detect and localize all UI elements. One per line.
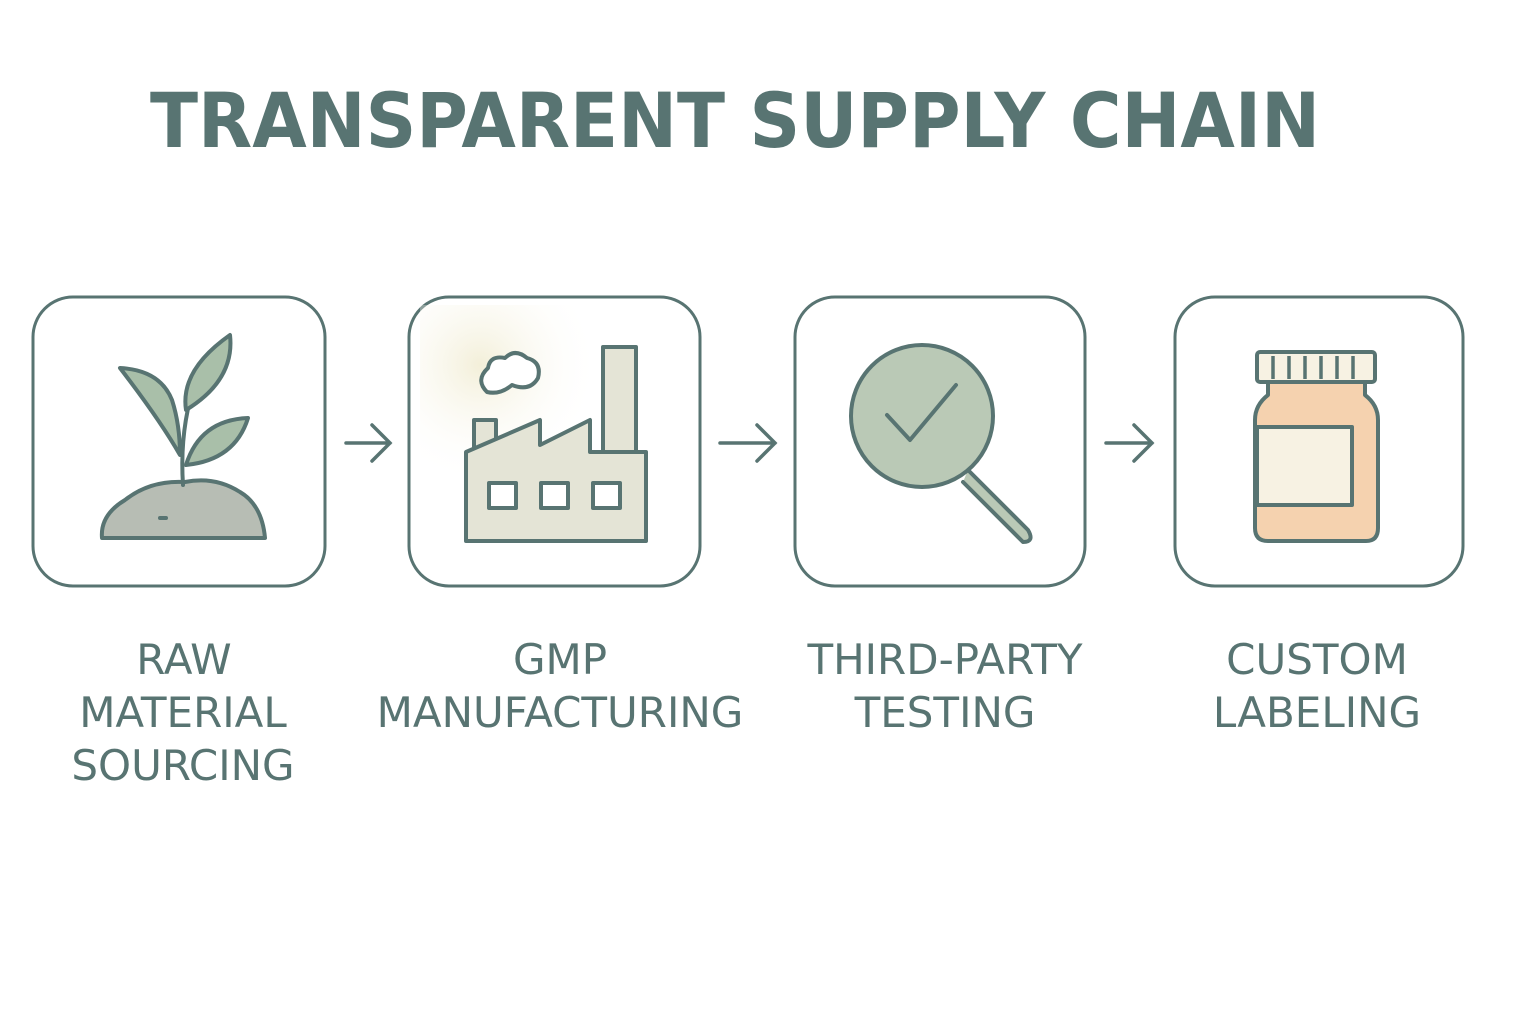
arrow 1 xyxy=(346,425,390,461)
label: raw material sourcing: RAW xyxy=(136,635,232,684)
panel: custom labeling xyxy=(1175,297,1463,586)
label: GMP manufacturing: MANUFACTURING xyxy=(377,688,743,737)
panel: raw material sourcing xyxy=(33,297,325,586)
panel: GMP manufacturing xyxy=(409,297,700,586)
label: raw material sourcing xyxy=(71,635,295,790)
label: third-party testing xyxy=(806,635,1083,737)
icon: magnifier with check xyxy=(851,345,1031,542)
label: GMP manufacturing xyxy=(377,635,743,737)
label: raw material sourcing: MATERIAL xyxy=(79,688,287,737)
icon: plant xyxy=(102,335,265,538)
label: custom labeling: CUSTOM xyxy=(1226,635,1408,684)
label: third-party testing: TESTING xyxy=(854,688,1035,737)
label: custom labeling: LABELING xyxy=(1213,688,1421,737)
arrow 2 xyxy=(720,425,775,461)
label: raw material sourcing: SOURCING xyxy=(71,741,295,790)
icon: supplement bottle xyxy=(1255,352,1378,541)
label: third-party testing: THIRD-PARTY xyxy=(806,635,1083,684)
label: custom labeling xyxy=(1213,635,1421,737)
arrow 3 xyxy=(1106,425,1152,461)
icon: factory xyxy=(466,347,646,541)
title: TRANSPARENT SUPPLY CHAIN xyxy=(150,76,1320,165)
label: GMP manufacturing: GMP xyxy=(513,635,607,684)
panel: third-party testing xyxy=(795,297,1085,586)
